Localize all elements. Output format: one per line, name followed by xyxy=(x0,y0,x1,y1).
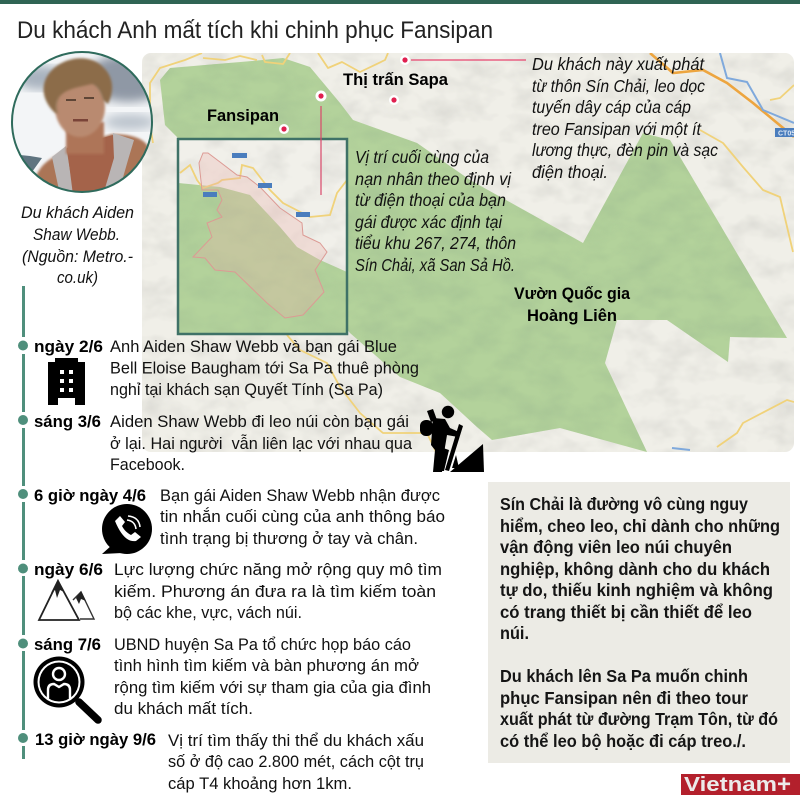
callout: advice: có thể leo bộ hoặc đi cáp treo./. xyxy=(500,731,746,751)
callout: advice xyxy=(488,482,790,763)
icon: phone call bubble xyxy=(102,504,152,554)
label: Fansipan: Fansipan xyxy=(207,106,279,125)
orange main road xyxy=(650,53,794,137)
callout: advice: Sín Chải là đường vô cùng nguy xyxy=(500,494,748,514)
event: 7/6: UBND huyện Sa Pa tổ chức họp báo cáo xyxy=(114,636,411,654)
callout: advice: xuất phát từ đường Trạm Tôn, từ đó xyxy=(500,709,778,729)
note: last location: từ điện thoại của bạn xyxy=(355,190,506,210)
panel: map xyxy=(142,53,795,452)
note: last location: nạn nhân theo định vị xyxy=(355,169,512,189)
event: 4/6: Bạn gái Aiden Shaw Webb nhận được xyxy=(160,487,440,505)
shoulders xyxy=(36,132,148,187)
event: 7/6: rộng tìm kiếm với sự tham gia của gia đình xyxy=(114,679,431,697)
icon: magnifier with person xyxy=(34,656,98,720)
note: last location xyxy=(355,147,516,275)
map base terrain xyxy=(142,53,795,452)
callout: advice: núi. xyxy=(500,623,529,643)
event: 9/6: số ở độ cao 2.800 mét, cách cột trụ xyxy=(168,753,424,771)
event: 4/6: tình trạng bị thương ở tay và chân. xyxy=(160,530,418,548)
callout: advice: có trang thiết bị cần thiết để leo xyxy=(500,602,752,622)
event: 7/6: tình hình tìm kiếm và bàn phương án mở xyxy=(114,657,419,675)
note: route: tuyến dây cáp của cáp xyxy=(532,97,691,117)
note: route: lương thực, đèn pin và sạc xyxy=(532,140,718,160)
callout: advice: tự do, thiếu kinh nghiệm và không xyxy=(500,580,773,600)
event: 6/6 xyxy=(34,560,442,622)
event: 7/6 xyxy=(34,635,431,718)
event: 3/6: ở lại. Hai người vẫn liên lạc với nhau qua xyxy=(110,434,413,453)
event: 4/6: tin nhắn cuối cùng của anh thông báo xyxy=(160,507,445,526)
marker: Fansipan xyxy=(279,124,289,134)
note: last location: Sín Chải, xã San Sả Hồ. xyxy=(355,255,515,275)
hair xyxy=(44,58,112,114)
event: 7/6: sáng 7/6 xyxy=(34,635,101,654)
event: 9/6: cáp T4 khoảng hơn 1km. xyxy=(168,775,352,793)
label: Thị trấn Sapa: Thị trấn Sapa xyxy=(343,70,449,89)
event: 6/6: ngày 6/6 xyxy=(34,560,103,579)
logo: Vietnam+: Vietnam xyxy=(684,774,777,796)
event: 3/6: Aiden Shaw Webb đi leo núi còn bạn gái xyxy=(110,413,409,431)
label: Vườn Quốc gia Hoàng Liên: Vườn Quốc gia xyxy=(514,284,631,303)
marker: last location and leader xyxy=(316,90,326,195)
river xyxy=(720,53,794,123)
marker: Sapa xyxy=(389,95,399,105)
icon: hotel building xyxy=(48,358,85,405)
event: 4/6: 6 giờ ngày 4/6 xyxy=(34,486,146,505)
label: Vườn Quốc gia Hoàng Liên xyxy=(514,284,631,325)
photo caption: Shaw Webb. xyxy=(33,226,120,244)
commune boundary xyxy=(193,153,327,318)
event: 3/6: Facebook. xyxy=(110,456,185,474)
marker: start point and leader xyxy=(400,55,526,65)
event: 6/6: Lực lượng chức năng mở rộng quy mô tìm xyxy=(114,561,442,579)
event: 4/6 xyxy=(34,486,445,548)
note: route: từ thôn Sín Chải, leo dọc xyxy=(532,76,705,96)
logo: Vietnam+ xyxy=(681,771,800,798)
callout: advice: nghiệp, không dành cho du khách xyxy=(500,559,770,579)
event: 7/6: du khách mất tích. xyxy=(114,700,253,718)
icon: hiker xyxy=(420,406,484,472)
label: Vườn Quốc gia Hoàng Liên: Hoàng Liên xyxy=(527,306,617,325)
note: last location: Vị trí cuối cùng của xyxy=(355,147,489,167)
tank top xyxy=(52,146,72,190)
note: route: treo Fansipan với một ít xyxy=(532,119,702,139)
callout: advice: hiểm, cheo leo, chỉ dành cho những xyxy=(500,516,780,536)
note: route: điện thoại. xyxy=(532,162,608,182)
event: 2/6: Anh Aiden Shaw Webb và bạn gái Blue xyxy=(110,338,397,356)
event: 9/6: 13 giờ ngày 9/6 xyxy=(35,730,156,749)
photo caption: Du khách Aiden xyxy=(21,204,134,222)
logo: Vietnam+: + xyxy=(777,771,791,798)
event: 9/6 xyxy=(35,730,424,793)
event: 2/6: nghỉ tại khách sạn Quyết Tính (Sa Pa) xyxy=(110,381,383,399)
chest xyxy=(67,135,114,195)
road label: CT05 xyxy=(778,130,795,138)
callout: advice: phục Fansipan nên đi theo tour xyxy=(500,688,748,708)
photo caption: co.uk) xyxy=(57,269,98,287)
event: 2/6 xyxy=(34,337,419,399)
note: route: Du khách này xuất phát xyxy=(532,54,705,74)
event: 3/6: sáng 3/6 xyxy=(34,412,101,431)
callout: advice: Du khách lên Sa Pa muốn chinh xyxy=(500,666,748,686)
note: last location: gái được xác định tại xyxy=(355,212,503,232)
event: 9/6: Vị trí tìm thấy thi thể du khách xấu xyxy=(168,732,424,750)
note: route xyxy=(532,54,718,182)
event: 6/6: kiếm. Phương án đưa ra là tìm kiếm toàn xyxy=(114,583,436,601)
note: last location: tiểu khu 267, 274, thôn xyxy=(355,233,516,253)
national park green area xyxy=(142,53,794,452)
face xyxy=(55,77,105,137)
top bar xyxy=(0,0,800,4)
blue river bottom xyxy=(672,448,690,450)
road label xyxy=(775,128,794,137)
yellow roads xyxy=(150,53,794,452)
callout: advice: vận động viên leo núi chuyên xyxy=(500,537,732,557)
inset map xyxy=(178,139,347,334)
event: 6/6: bộ các khe, vực, vách núi. xyxy=(114,604,302,622)
portrait photo xyxy=(11,51,153,193)
title: Du khách Anh mất tích khi chinh phục Fansipan xyxy=(17,17,493,44)
event: 2/6: Bell Eloise Baugham tới Sa Pa thuê phòng xyxy=(110,360,419,378)
event: 3/6 xyxy=(34,412,413,474)
icon: mountains xyxy=(39,579,94,620)
photo caption: (Nguồn: Metro.- xyxy=(22,248,133,266)
photo caption xyxy=(21,204,134,287)
event: 2/6: ngày 2/6 xyxy=(34,337,103,356)
timeline line and dots xyxy=(18,286,28,759)
